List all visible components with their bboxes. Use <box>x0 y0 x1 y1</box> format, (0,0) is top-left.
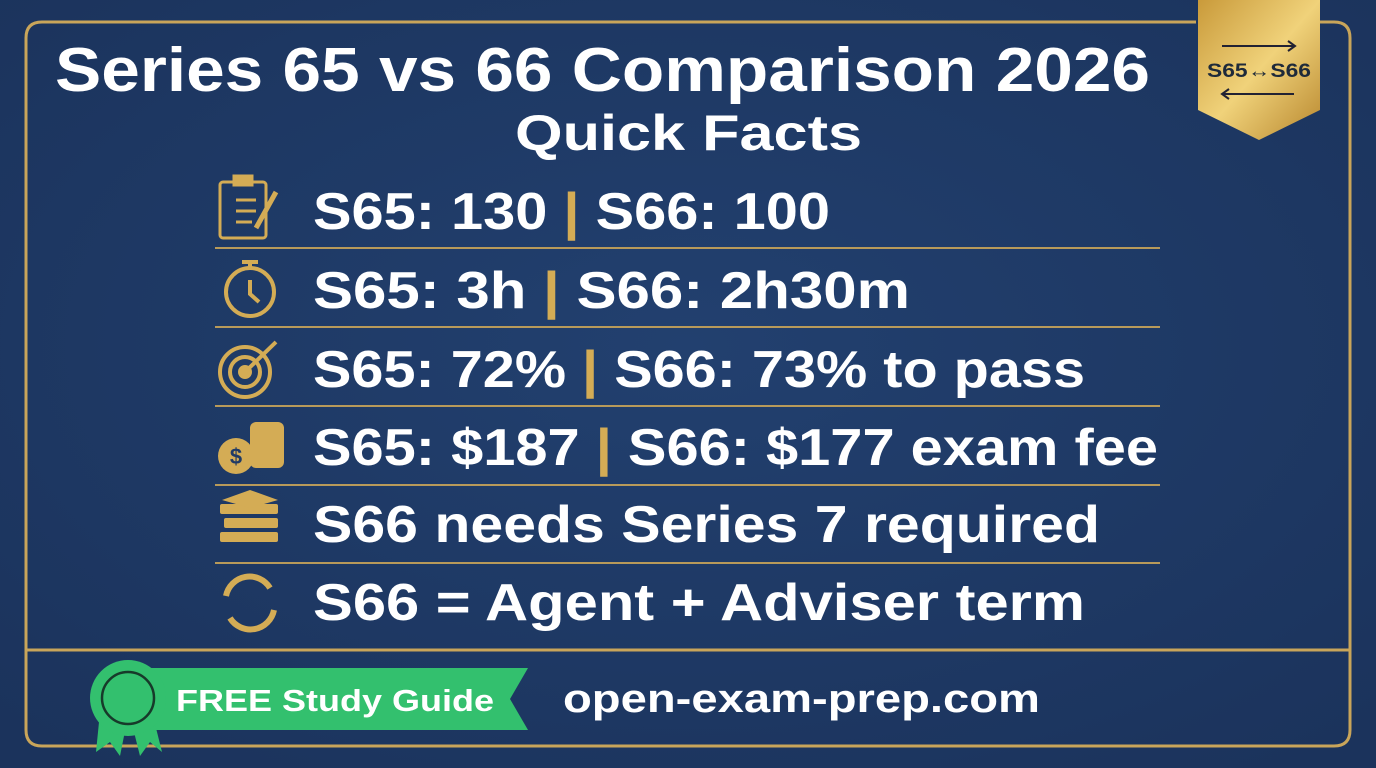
icon: cycle arrows <box>226 577 274 629</box>
ribbon: free study guide: FREE Study Guide <box>176 683 494 718</box>
icon: books with cap <box>220 490 278 542</box>
title: Series 65 vs 66 Comparison 2026 <box>55 36 1150 105</box>
row: pass score: S65: 72% | S66: 73% to pass <box>313 341 1085 399</box>
icon: target <box>220 342 276 397</box>
dividers <box>215 248 1160 563</box>
icon: coins <box>218 422 284 474</box>
badge: S65 vs S66: S65↔S66 <box>1207 61 1311 82</box>
row: prerequisite: S66 needs Series 7 required <box>313 496 1100 554</box>
icon: coins: $ <box>230 444 242 469</box>
subtitle: Quick Facts <box>515 105 862 161</box>
badge: S65 vs S66 <box>1198 0 1320 140</box>
footer url: open-exam-prep.com <box>563 677 1040 721</box>
row: questions: S65: 130 | S66: 100 <box>313 183 830 241</box>
row: definition: S66 = Agent + Adviser term <box>313 574 1085 632</box>
icon: stopwatch <box>226 262 274 316</box>
row: fee: S65: $187 | S66: $177 exam fee <box>313 419 1158 477</box>
icon: clipboard <box>220 176 276 238</box>
ribbon: free study guide <box>90 660 528 756</box>
row: time: S65: 3h | S66: 2h30m <box>313 262 910 320</box>
